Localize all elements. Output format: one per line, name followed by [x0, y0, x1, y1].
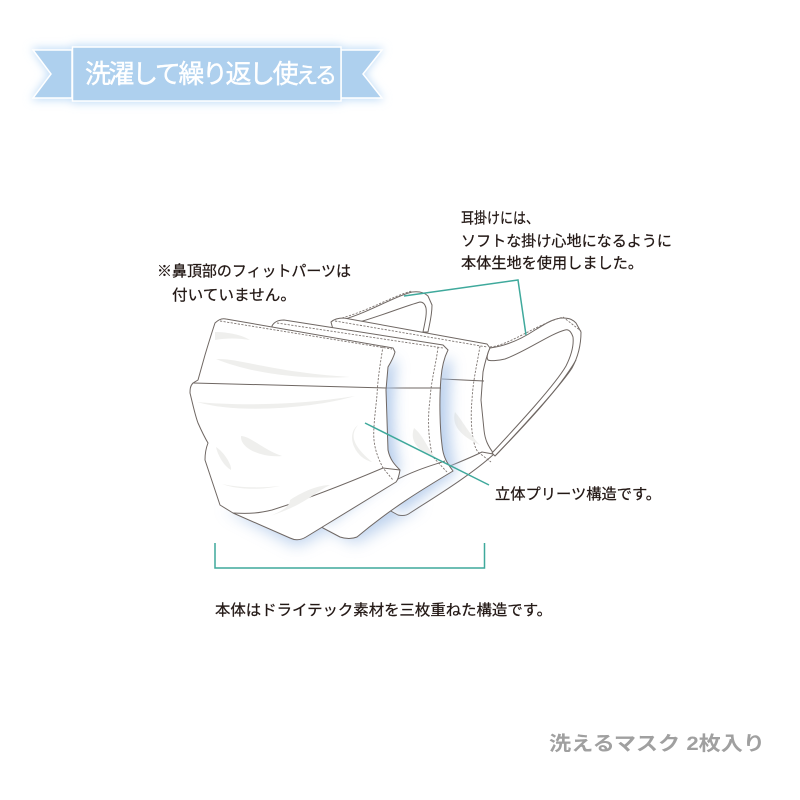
note: ear loop callout: 本体生地を使用しました。 — [461, 255, 643, 272]
leader: ear loop — [404, 280, 526, 335]
shadow cast by second mask — [388, 360, 456, 514]
bracket — [215, 543, 484, 568]
product name: 洗えるマスク 2枚入り — [549, 733, 765, 755]
banner centre — [72, 47, 341, 101]
note: nose fit parts: 付いていません。 — [172, 287, 296, 304]
shadow cast by front mask — [320, 360, 400, 525]
banner right tail — [341, 50, 382, 98]
label: pleat structure: 立体プリーツ構造です。 — [495, 486, 661, 503]
note: nose fit parts: ※鼻頂部のフィットパーツは — [157, 263, 351, 280]
mask illustration — [190, 291, 581, 546]
third mask — [331, 318, 494, 516]
back ear loop — [342, 291, 432, 332]
leader: pleat — [365, 423, 489, 485]
banner — [31, 45, 384, 103]
front mask — [190, 319, 400, 540]
pleat shadows — [215, 332, 250, 340]
right ear loop — [487, 317, 581, 456]
banner left tail — [33, 50, 72, 98]
banner title: 洗濯して繰り返し使える — [85, 59, 337, 89]
soft blue shadows below masks — [225, 490, 420, 546]
note: ear loop callout: ソフトな掛け心地になるように — [461, 233, 672, 250]
note: ear loop callout: 耳掛けには、 — [461, 210, 539, 227]
caption: three layers: 本体はドライテック素材を三枚重ねた構造です。 — [215, 602, 552, 619]
second mask — [272, 320, 453, 538]
note: ear loop callout — [461, 210, 672, 272]
note: nose fit parts — [157, 263, 351, 304]
